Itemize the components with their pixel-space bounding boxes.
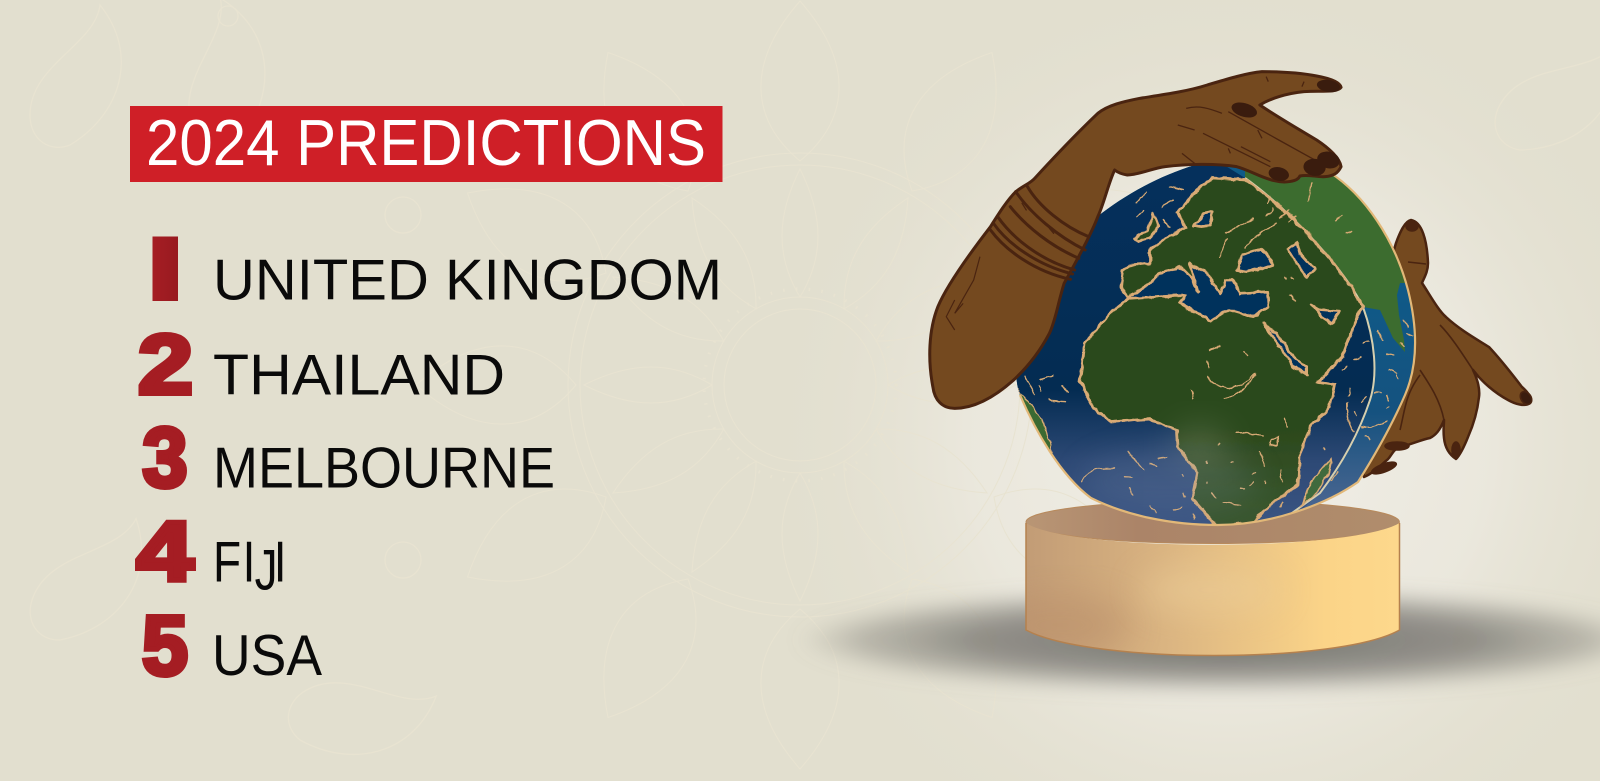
Baltic Sea: [1193, 212, 1213, 227]
front disc ocean: [1016, 166, 1374, 524]
rank 4 label: I: [274, 531, 287, 595]
ground shadow: [795, 588, 1600, 692]
decorative land and ocean dashes: [1137, 183, 1412, 387]
rank 4 number: 4: [136, 504, 194, 598]
UK: [1135, 213, 1158, 242]
rank 3 number: 3: [142, 410, 188, 504]
coastlines group: [1014, 178, 1412, 527]
seas, lakes and islands: [1130, 183, 1412, 387]
rank 1 number: [152, 224, 178, 318]
Caspian Sea: [1288, 242, 1315, 277]
Persian Gulf: [1312, 305, 1340, 323]
right hand: [1350, 220, 1531, 477]
right hand nails and creases: [1370, 221, 1534, 476]
rank 3 label: MELBOURNE: [213, 436, 555, 500]
soft haze near base of globe: [1080, 448, 1260, 512]
nails and ring: [1229, 78, 1344, 184]
rank 4 label: F: [213, 531, 241, 595]
South America sliver: [1014, 385, 1052, 452]
rank 4 label: J: [255, 539, 278, 603]
rank 5 label: USA: [212, 624, 323, 688]
infographic canvas: [130, 70, 1600, 748]
arm silhouette: [930, 72, 1341, 408]
rank 1 number: 1: [153, 224, 177, 318]
back band ocean: [1016, 166, 1414, 508]
Mediterranean Sea: [1130, 263, 1268, 321]
continents: Eurasia and Africa: [1080, 178, 1363, 527]
Black Sea: [1237, 248, 1273, 272]
left arm and hand: [930, 72, 1344, 408]
pedestal top: [1026, 500, 1399, 544]
rank 1 label: UNITED KINGDOM: [213, 248, 722, 312]
rank 2 label: THAILAND: [213, 344, 505, 408]
title text: 2024 PREDICTIONS: [146, 106, 706, 179]
Red Sea: [1263, 323, 1307, 375]
back band green land: [1245, 171, 1405, 352]
rank 4 label: I: [243, 531, 255, 595]
arm tattoo: [946, 257, 980, 330]
illustration: hands around globe on pedestal: [795, 72, 1600, 692]
finger creases: [1178, 77, 1321, 167]
ranked list: [136, 224, 722, 692]
rank 2 number: 2: [138, 318, 193, 412]
globe: [1016, 166, 1414, 524]
pedestal: [990, 500, 1400, 656]
globe outer rim: [1020, 172, 1415, 525]
rank 5 number: 5: [142, 598, 188, 692]
title banner: [130, 106, 722, 182]
pedestal side: [990, 523, 1400, 656]
bangles: [990, 186, 1089, 279]
lower globe dashes and Madagascar: [1025, 375, 1398, 518]
front disc edge line: [1245, 178, 1374, 518]
